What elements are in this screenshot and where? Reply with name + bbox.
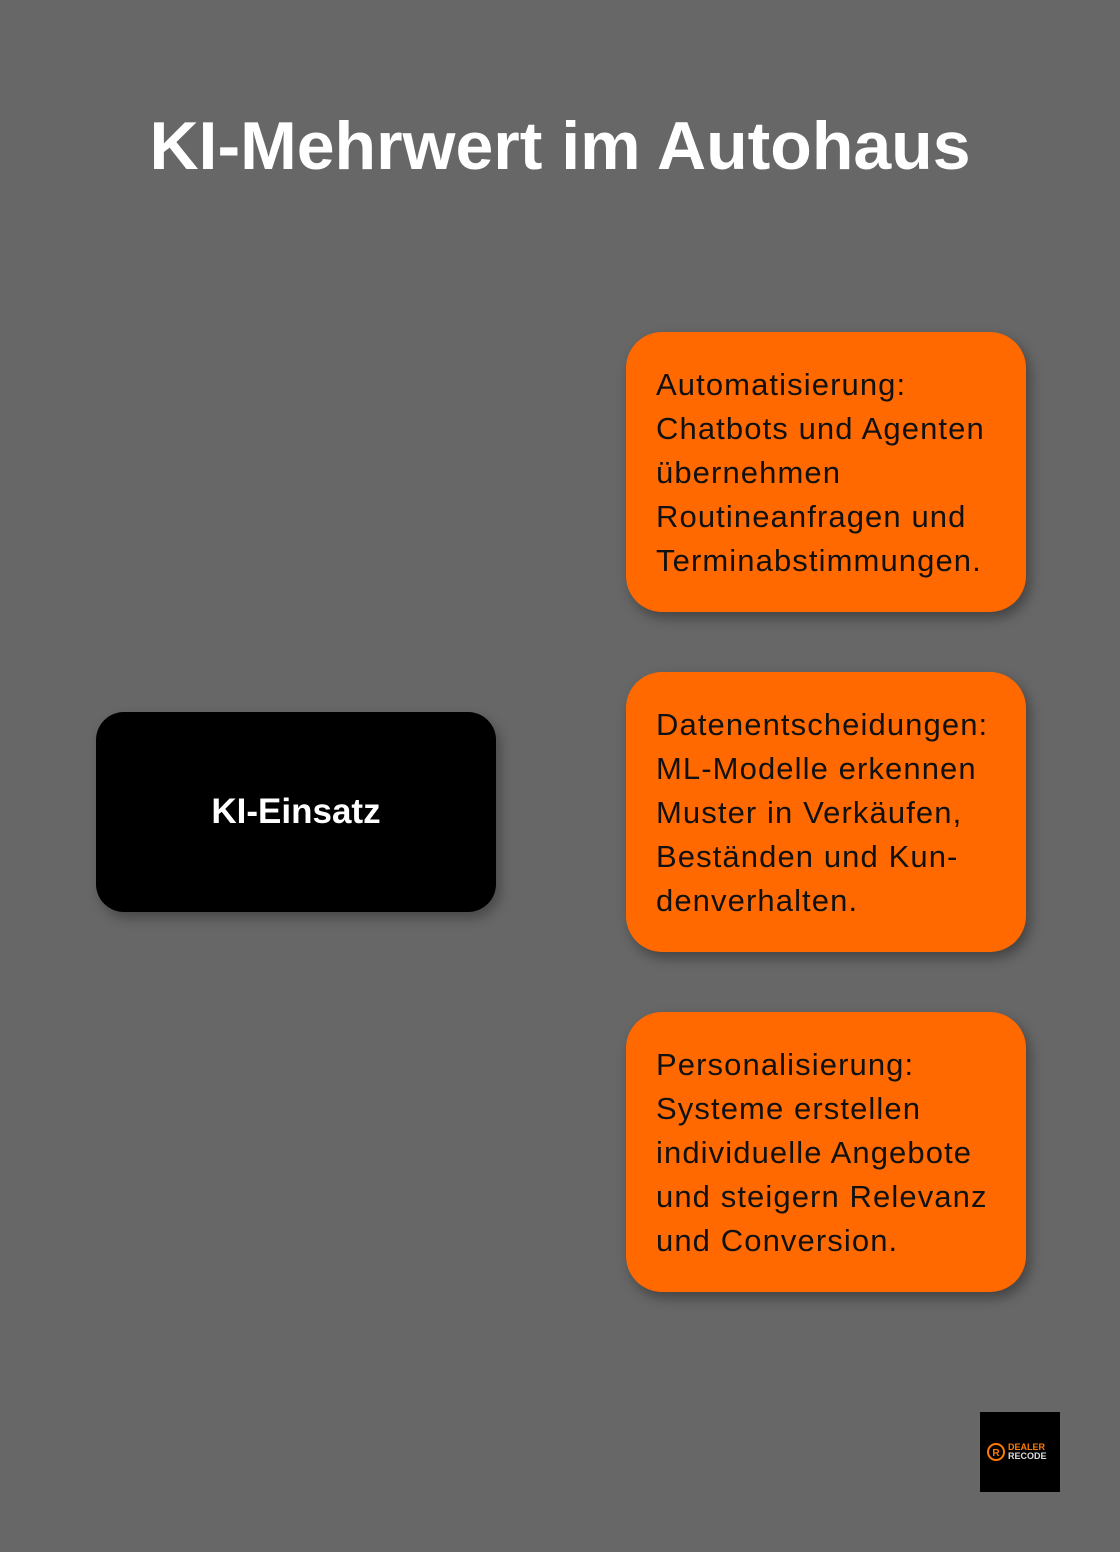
logo: Dealer Recode: RECODE (1008, 1451, 1047, 1461)
card: Automatisierung (626, 332, 1026, 612)
central box: KI-Einsatz: KI-Einsatz (211, 792, 381, 831)
logo: Dealer Recode: DEALER (1008, 1442, 1046, 1452)
logo: Dealer Recode: R (992, 1448, 1000, 1459)
central box: KI-Einsatz (96, 712, 496, 912)
logo: Dealer Recode (980, 1412, 1060, 1492)
card: Automatisierung: Automatisierung: Chatbots und Agenten übernehmen Routineanfragen und Terminabstimmungen. (656, 367, 985, 578)
card: Personalisierung (626, 1012, 1026, 1292)
card: Personalisierung: Personalisierung: Systeme erstellen individuelle Angebote und steigern Relevanz und Conversion. (656, 1047, 988, 1258)
card: Datenentscheidungen (626, 672, 1026, 952)
card: Datenentscheidungen: Datenentscheidungen: ML-Modelle erkennen Muster in Verkäufen, Beständen und Kun-denverhalten. (656, 707, 988, 918)
title: KI-Mehrwert im Autohaus (149, 108, 971, 184)
